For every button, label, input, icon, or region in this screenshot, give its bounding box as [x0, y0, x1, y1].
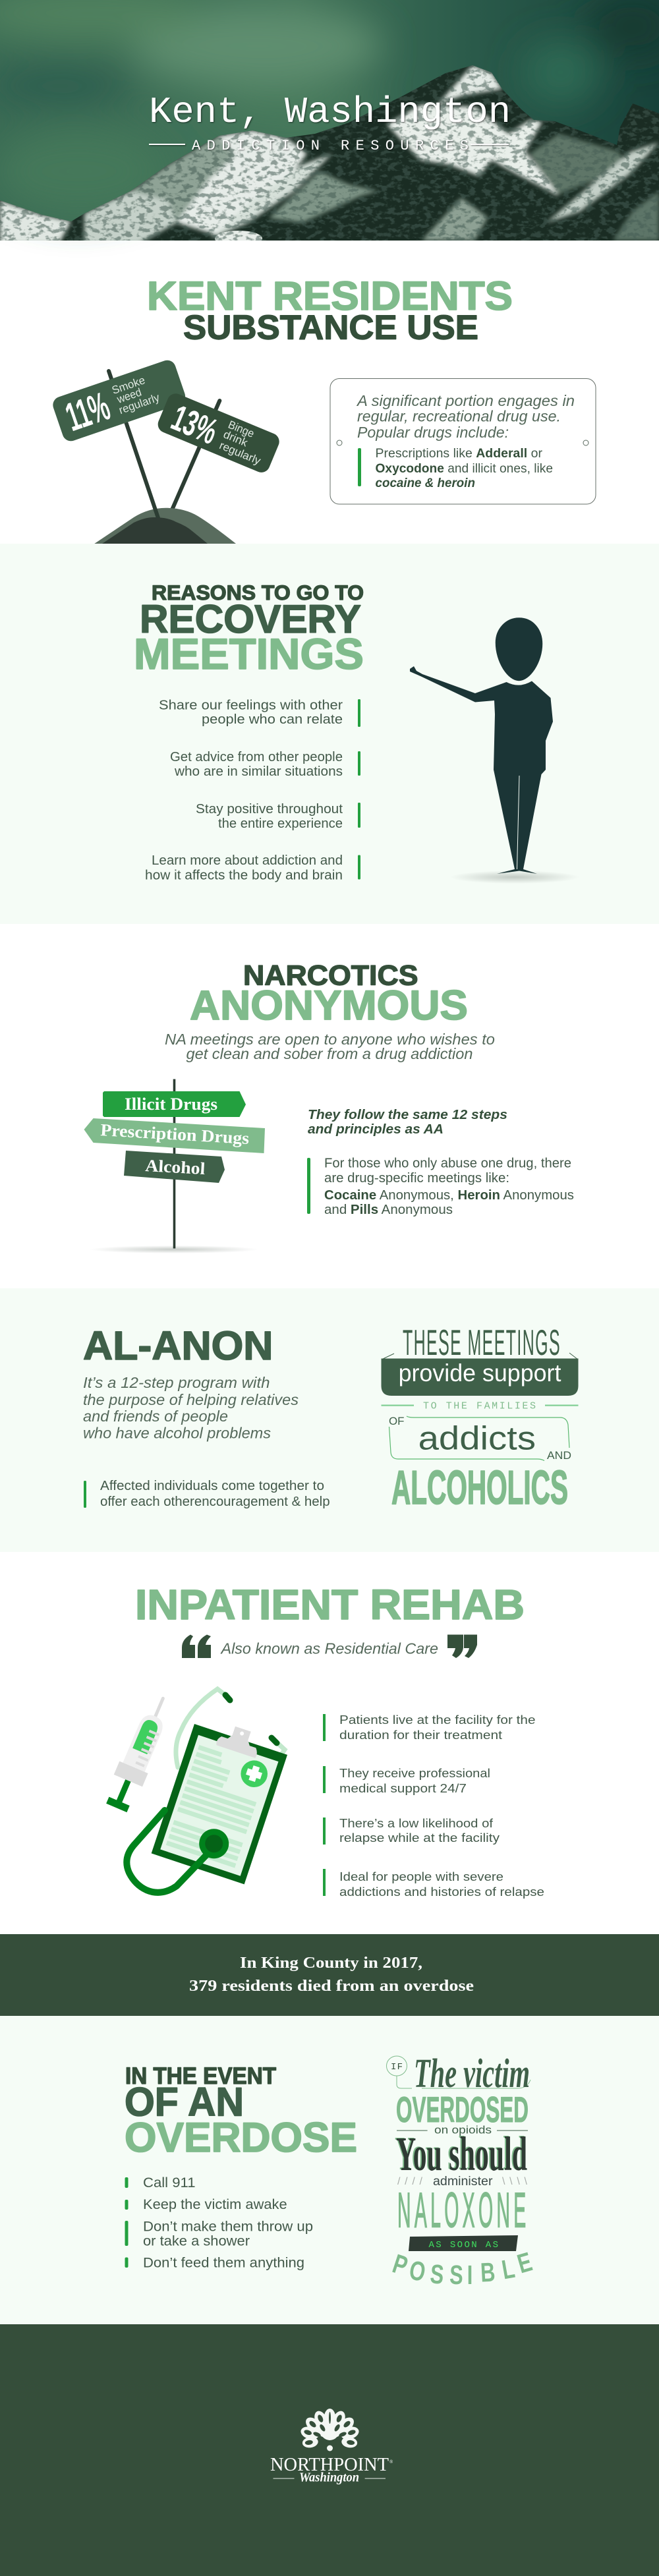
heading: reasons to go to recovery meetings: MEETINGS [134, 630, 364, 678]
text: drug-specific meetings [307, 1156, 574, 1217]
callout: popular drugs plaque: Prescriptions like Adderall or [376, 447, 543, 461]
fact 4: addictions and histories of relapse [339, 1885, 544, 1899]
stethoscope lower tube and chest piece [127, 1810, 229, 1893]
medical cross badge [241, 1760, 268, 1787]
sign: 13% binge drink regularly: drink [221, 428, 250, 449]
text: affected individuals: offer each otherencouragement & help [100, 1495, 330, 1509]
sign: 11% smoke weed regularly: regularly [117, 391, 161, 416]
callout: popular drugs plaque: Popular drugs include: [357, 424, 509, 441]
list: overdose steps: or take a shower [143, 2234, 250, 2249]
panel: al-anon background [0, 1288, 659, 1552]
heading: inpatient rehab: INPATIENT REHAB [135, 1581, 525, 1628]
typographic lockup: if the victim overdosed: S [449, 2259, 464, 2290]
sign: 11% smoke weed regularly [51, 358, 188, 444]
typographic lockup: if the victim overdosed: P [389, 2248, 411, 2281]
footer band [0, 2324, 659, 2576]
text: al-anon description: It’s a 12-step program with [83, 1374, 270, 1391]
text: drug-specific meetings: For those who only abuse one drug, there [324, 1156, 571, 1170]
list: reasons to attend [145, 699, 360, 883]
syringe [102, 1691, 178, 1814]
text: same 12 steps as AA: They follow the same 12 steps [308, 1108, 507, 1122]
typographic lockup: if the victim overdosed: IF [391, 2062, 403, 2073]
heading: in the event of an overdose [125, 2063, 357, 2161]
text: al-anon description: the purpose of helping relatives [83, 1391, 299, 1408]
sign: alcohol [124, 1151, 225, 1183]
stethoscope upper tube [176, 1689, 285, 1767]
callout: popular drugs plaque: cocaine & heroin [376, 476, 475, 490]
logo: NorthPoint Washington: NORTHPOINT [270, 2454, 389, 2475]
sign: 13% binge drink regularly: regularly [217, 439, 263, 467]
sign: 13% binge drink regularly [155, 391, 282, 476]
reason 3: Stay positive throughout [196, 802, 343, 816]
illustration: signpost with drug categories [84, 1079, 265, 1253]
reason 2: who are in similar situations [174, 764, 343, 779]
typographic lockup: these meetings provide support [381, 1322, 579, 1514]
fact 1: duration for their treatment [339, 1729, 502, 1742]
sign: prescription drugs [84, 1118, 265, 1153]
heading: narcotics anonymous [190, 960, 468, 1029]
callout: popular drugs plaque: regular, recreational drug use. [357, 407, 561, 424]
typographic lockup: if the victim overdosed: on opioids [434, 2124, 492, 2136]
fact 2: medical support 24/7 [339, 1782, 467, 1795]
typographic lockup: if the victim overdosed: \\\\ [502, 2176, 528, 2187]
typographic lockup: these meetings provide support: OF [389, 1415, 405, 1427]
reason 2 [170, 750, 360, 779]
text: al-anon description: who have alcohol problems [83, 1425, 272, 1442]
typographic lockup: if the victim overdosed: OVERDOSED [396, 2090, 529, 2130]
typographic lockup: if the victim overdosed: L [500, 2253, 517, 2285]
text: al-anon description: and friends of people [83, 1408, 228, 1425]
logo: NorthPoint Washington: Washington [299, 2470, 359, 2484]
typographic lockup: these meetings provide support: TO THE FAMILIES [423, 1401, 536, 1412]
reason 1: people who can relate [202, 712, 343, 727]
sign: alcohol: Alcohol [145, 1156, 206, 1178]
typographic lockup: if the victim overdosed: E [514, 2246, 535, 2279]
fact 2: They receive professional [339, 1767, 490, 1780]
heading: narcotics anonymous: NARCOTICS [243, 960, 418, 992]
panel: overdose background [0, 2016, 659, 2324]
list: overdose steps: Keep the victim awake [143, 2197, 287, 2212]
typographic lockup: if the victim overdosed: You should [395, 2127, 526, 2180]
logo: NorthPoint Washington: ® [389, 2459, 393, 2465]
banner: King County statistic [0, 1934, 659, 2016]
reason 4: Learn more about addiction and [152, 853, 343, 868]
text: NA meetings intro [165, 1031, 495, 1062]
heading: Kent residents substance use: SUBSTANCE USE [183, 308, 478, 347]
callout: popular drugs plaque [330, 378, 596, 504]
sign: prescription drugs: Prescription Drugs [100, 1120, 250, 1148]
reason 4 [145, 853, 360, 883]
fact 3: relapse while at the facility [339, 1831, 500, 1845]
subheading with quote marks: residential care [182, 1634, 477, 1658]
illustration: standing figure pointing at the list [410, 617, 579, 884]
logo mark: peacock fan [299, 2409, 360, 2451]
fact 1: Patients live at the facility for the [339, 1713, 535, 1727]
reason 3 [196, 802, 360, 831]
heading: Kent residents substance use: KENT RESIDENTS [147, 273, 513, 318]
sign: 13% binge drink regularly: 13% [166, 397, 223, 452]
typographic lockup: if the victim overdosed: B [480, 2256, 496, 2288]
typographic lockup: if the victim overdosed: //// [397, 2176, 423, 2187]
typographic lockup: if the victim overdosed: AS SOON AS [428, 2240, 498, 2250]
text: NA meetings intro: get clean and sober from a drug addiction [186, 1045, 473, 1062]
banner: King County statistic: 379 residents died from an overdose [189, 1978, 474, 1995]
fact 4 [323, 1869, 544, 1899]
fact 3: There’s a low likelihood of [339, 1817, 494, 1830]
list: overdose steps: Don’t make them throw up [143, 2219, 313, 2234]
heading: in the event of an overdose: OF AN [125, 2080, 244, 2125]
illustration: syringe, clipboard and stethoscope [102, 1689, 291, 1893]
fact 2 [323, 1766, 490, 1795]
list: overdose steps [125, 2175, 313, 2271]
heading: Kent residents substance use [147, 273, 513, 347]
heading: in the event of an overdose: IN THE EVENT [125, 2063, 276, 2089]
text: affected individuals: Affected individuals come together to [100, 1479, 324, 1493]
typographic lockup: these meetings provide support: AND [547, 1449, 571, 1462]
typographic lockup: if the victim overdosed: You should [396, 2127, 527, 2181]
sign: 11% smoke weed regularly: 11% [60, 384, 115, 440]
fact 1 [323, 1713, 535, 1742]
text: same 12 steps as AA [308, 1108, 507, 1137]
typographic lockup: these meetings provide support: provide support [399, 1360, 561, 1387]
list: overdose steps: Call 911 [143, 2175, 195, 2190]
reason 4: how it affects the body and brain [145, 869, 343, 883]
typographic lockup: if the victim overdosed: O [407, 2254, 428, 2287]
typographic lockup: if the victim overdosed: administer [433, 2175, 493, 2189]
heading: in the event of an overdose: OVERDOSE [125, 2115, 357, 2161]
sign: illicit drugs: Illicit Drugs [125, 1095, 217, 1114]
text: same 12 steps as AA: and principles as AA [308, 1122, 444, 1137]
reason 2: Get advice from other people [170, 750, 343, 764]
callout: popular drugs plaque: Oxycodone and illicit ones, like [376, 462, 553, 476]
sign: 13% binge drink regularly: Binge [226, 418, 256, 440]
subtitle with side rules: ADDICTION RESOURCES [192, 138, 469, 154]
typographic lockup: if the victim overdosed [386, 2051, 535, 2290]
fact 4: Ideal for people with severe [339, 1870, 503, 1883]
typographic lockup: these meetings provide support: addicts [418, 1420, 536, 1457]
text: drug-specific meetings: are drug-specific meetings like: [324, 1171, 509, 1186]
typographic lockup: if the victim overdosed: The victim [414, 2051, 530, 2096]
banner: King County statistic: In King County in 2017, [240, 1955, 422, 1972]
fact 3 [323, 1817, 500, 1845]
list: inpatient rehab facts [323, 1713, 544, 1899]
callout: popular drugs plaque: A significant portion engages in [356, 392, 575, 409]
sign: 11% smoke weed regularly: Smoke [110, 374, 147, 397]
sign: 11% smoke weed regularly: weed [115, 386, 143, 406]
typographic lockup: if the victim overdosed: I [467, 2260, 473, 2290]
title: Kent, Washington [149, 91, 511, 133]
reason 1 [159, 699, 360, 727]
text: affected individuals [84, 1479, 330, 1509]
list: overdose steps: Don’t feed them anything [143, 2256, 304, 2271]
heading: narcotics anonymous: ANONYMOUS [190, 983, 468, 1029]
text: NA meetings intro: NA meetings are open to anyone who wishes to [165, 1031, 495, 1048]
illustration: two stat signs on a hill [51, 358, 282, 544]
reason 3: the entire experience [218, 816, 343, 831]
reason 1: Share our feelings with other [159, 699, 343, 713]
clipboard [152, 1714, 291, 1884]
logo: NorthPoint Washington [270, 2409, 393, 2484]
subheading with quote marks: residential care: Also known as Residential Care [219, 1640, 438, 1657]
heading: reasons to go to recovery meetings [134, 581, 364, 678]
panel: recovery meetings background [0, 544, 659, 924]
typographic lockup: if the victim overdosed: S [429, 2258, 445, 2290]
hero photo: green sky and snowy mountain [0, 0, 659, 246]
text: al-anon description [83, 1374, 299, 1442]
heading: al-anon: AL-ANON [83, 1323, 273, 1368]
heading: reasons to go to recovery meetings: REASONS TO GO TO [152, 581, 364, 604]
heading: reasons to go to recovery meetings: RECOVERY [140, 597, 361, 641]
text: drug-specific meetings: and Pills Anonymous [324, 1203, 453, 1217]
sign: illicit drugs [103, 1091, 246, 1117]
text: drug-specific meetings: Cocaine Anonymous, Heroin Anonymous [324, 1188, 574, 1203]
